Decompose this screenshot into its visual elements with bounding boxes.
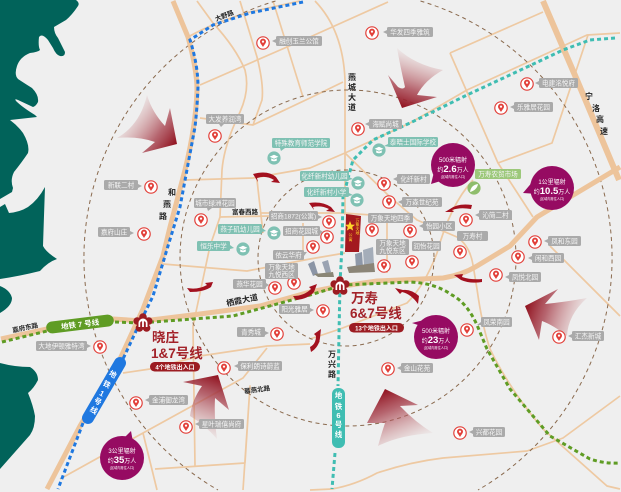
- large arrow: north: [388, 48, 443, 108]
- bubble: 3 km 35万人: 3公里辐射: [108, 447, 136, 455]
- bubble: 500 m 2.6万人: 约2.6万人: [437, 164, 469, 175]
- pill: metro line 6: 6: [336, 411, 341, 420]
- place: 阳光雅居: 阳光雅居: [281, 304, 308, 313]
- bubble: 500 m 23万人: [412, 315, 458, 359]
- place: 万寿村: 万寿村: [463, 231, 483, 240]
- metro line 1: [58, 2, 303, 489]
- place: 凤荣南园: [461, 317, 512, 336]
- school: 特殊教育师范学院: 特殊教育师范学院: [275, 138, 328, 147]
- large arrow: south: [183, 375, 229, 439]
- road name labels: 宁洛高速: [585, 91, 608, 136]
- place: 凤和东园: [529, 236, 581, 248]
- place: 万象天地九悦东区: 万象天地: [379, 238, 406, 248]
- place: 乐雅居花园: [495, 102, 553, 114]
- place: 融创玉兰公馆: [257, 36, 322, 49]
- bubble: 3 km 35万人: 约35万人: [108, 455, 136, 466]
- place: 汇杰新城: 汇杰新城: [575, 331, 602, 340]
- pill: metro line 6: [332, 388, 345, 448]
- school: 恒乐中学: [197, 241, 250, 256]
- bubble: 3 km 35万人: [100, 431, 144, 480]
- place: 城市绿洲花园: [194, 198, 236, 226]
- place: 海赋尚城: 海赋尚城: [372, 119, 399, 128]
- large arrow: south centre: [367, 389, 433, 446]
- bubble: 1 km 10.5万人: 1公里辐射: [538, 178, 566, 186]
- place: 化纤新村: [378, 174, 430, 190]
- place: 依云华府: 依云华府: [275, 250, 302, 259]
- place: 招商花园城: 招商花园城: [285, 226, 318, 235]
- bubble: 500 m 2.6万人: [431, 143, 475, 187]
- large arrow: east: [525, 289, 587, 340]
- place: 凤荣南园: 凤荣南园: [483, 317, 510, 326]
- large arrow: northwest: [117, 95, 177, 153]
- place: 依云华府: [273, 241, 319, 260]
- place: 燕华花园: [233, 279, 281, 294]
- bubble: 3 km 35万人: (区域内常住人口): [110, 465, 134, 470]
- place: 乐雅居花园: 乐雅居花园: [517, 102, 550, 111]
- bubble: 1 km 10.5万人: (区域内常住人口): [540, 196, 564, 201]
- bubble: 500 m 2.6万人: (区域内常住人口): [441, 174, 465, 179]
- place: 闲和西园: 闲和西园: [535, 253, 562, 262]
- place: 城市绿洲花园: 城市绿洲花园: [195, 198, 235, 207]
- bubble: 500 m 2.6万人: 500米辐射: [439, 156, 467, 164]
- road name labels: 和燕路: [159, 187, 176, 221]
- road name labels: 富春西路: [232, 207, 258, 216]
- road name labels: 大野路: [213, 7, 235, 23]
- place: 化纤新村: 化纤新村: [400, 174, 427, 183]
- place: 润怡花园: 润怡花园: [413, 241, 440, 250]
- place: 金山花苑: 金山花苑: [404, 363, 431, 372]
- road name labels: 栖霞大道: [225, 292, 259, 308]
- pill: metro line 6: 地: [335, 390, 343, 400]
- pill: metro line 7: 地铁 7 号线: [60, 317, 100, 331]
- market: 万寿农贸市场: 万寿农贸市场: [478, 169, 518, 178]
- project marker: 万寿天地公寓: [345, 214, 361, 252]
- project marker: 万寿天地公寓: 万象天地: [356, 218, 360, 236]
- place: 万寿村: [454, 231, 488, 258]
- bubble: 500 m 23万人: 约23万人: [422, 335, 450, 346]
- school: 燕子矶幼儿园: [218, 224, 281, 240]
- place: 万森世纪苑: 万森世纪苑: [406, 197, 439, 206]
- road name labels: [11, 7, 608, 396]
- place: 招商1872: [269, 211, 335, 228]
- place: 青秀城: 青秀城: [241, 327, 261, 336]
- project building renderings: [308, 247, 375, 277]
- metro station: 晓庄: 1&7号线: [151, 345, 203, 361]
- place: 沁简二村: [460, 210, 512, 226]
- place: 闲和西园: [512, 251, 564, 263]
- place: 金山花苑: [382, 363, 433, 375]
- place: 招商花园城: [283, 226, 333, 243]
- swoosh arrows: [187, 173, 482, 352]
- project marker: 万寿天地公寓: 公寓: [348, 232, 352, 242]
- place: 阳光雅居: [279, 304, 329, 317]
- market: 万寿农贸市场: [467, 169, 521, 195]
- metro station: 晓庄: 晓庄: [152, 329, 179, 345]
- place: 沁简二村: 沁简二村: [482, 210, 509, 219]
- place: 万象天地四季: [366, 213, 413, 236]
- place: 大发养润湾: 大发养润湾: [209, 114, 242, 123]
- place: 海赋尚城: [352, 119, 402, 135]
- pill: metro line 6: 铁: [335, 401, 343, 411]
- pill: metro line 1: 地铁1号线: [88, 368, 119, 416]
- place: 万象天地九悦西区: 九悦西区: [268, 270, 295, 279]
- place: 嘉府山庄: 嘉府山庄: [101, 227, 128, 236]
- metro station: 万寿: 13个地铁出入口: [355, 324, 398, 332]
- school: 恒乐中学: 恒乐中学: [200, 241, 227, 250]
- pill: metro line 6: 线: [335, 429, 343, 439]
- place: 兴都花园: [454, 427, 505, 439]
- school: 化纤新村幼儿园: 化纤新村幼儿园: [301, 171, 348, 180]
- place: 万象天地九悦西区: [265, 262, 300, 289]
- school: 化纤新村小学: 化纤新村小学: [307, 187, 347, 196]
- place: 大地伊顿雅特湾: 大地伊顿雅特湾: [38, 341, 85, 350]
- place: 保利朗诗蔚蓝: [218, 361, 282, 374]
- metro station: 万寿: 6&7号线: [350, 305, 402, 321]
- bubble: 1 km 10.5万人: [523, 166, 574, 210]
- water bodies: [0, 0, 79, 469]
- road name labels: 燕城大道: [348, 72, 356, 112]
- place: 万象天地四季: 万象天地四季: [371, 213, 411, 222]
- metro line 6: [332, 38, 615, 489]
- place: 润怡花园: [406, 241, 441, 268]
- place: 凤悦北园: 凤悦北园: [512, 272, 539, 281]
- place: 电建洺悦府: 电建洺悦府: [542, 78, 575, 87]
- bubble: 500 m 23万人: (区域内常住人口): [424, 345, 448, 350]
- place: 招商1872: 招商1872(公寓): [271, 211, 316, 220]
- road name labels: 慕燕北路: [244, 383, 271, 396]
- place: 万象天地九悦西区: 万象天地: [268, 262, 295, 272]
- place: 金浦御龙湾: 金浦御龙湾: [152, 395, 185, 404]
- place: 星叶瑞僖尚府: 星叶瑞僖尚府: [202, 419, 242, 428]
- metro station: 万寿: 万寿: [351, 290, 378, 306]
- pill: metro line 6: 号: [335, 420, 343, 429]
- metro line 7: [2, 282, 620, 463]
- pill: metro line 7: [46, 314, 114, 334]
- place: 青秀城: [237, 327, 283, 340]
- school: 燕子矶幼儿园: 燕子矶幼儿园: [220, 224, 260, 233]
- place: 星叶瑞僖尚府: [180, 419, 244, 433]
- place: 怡园小区: [404, 221, 455, 237]
- metro station: 晓庄: 4个地铁出入口: [155, 363, 195, 371]
- place: 新联二村: 新联二村: [108, 180, 135, 189]
- place: 华发四季雅筑: [366, 27, 433, 39]
- school: 泰晤士国际学校: [372, 137, 438, 157]
- place: 融创玉兰公馆: 融创玉兰公馆: [279, 36, 319, 45]
- place: 大发养润湾: [206, 114, 244, 142]
- place: 万象天地九悦东区: [376, 238, 409, 272]
- place: 保利朗诗蔚蓝: 保利朗诗蔚蓝: [240, 361, 280, 370]
- place: 凤悦北园: [490, 269, 541, 282]
- place: 凤和东园: 凤和东园: [551, 236, 578, 245]
- place: 华发四季雅筑: 华发四季雅筑: [390, 27, 430, 36]
- place: 金浦御龙湾: [130, 395, 188, 409]
- school: 化纤新村幼儿园: [300, 171, 365, 190]
- school: 泰晤士国际学校: 泰晤士国际学校: [390, 137, 436, 146]
- bubble: 1 km 10.5万人: 约10.5万人: [534, 186, 570, 197]
- school: 化纤新村小学: [304, 187, 364, 207]
- road name labels: 嘉府东路: [11, 320, 39, 335]
- place: 万森世纪苑: [383, 196, 442, 208]
- place: 电建洺悦府: [521, 78, 578, 90]
- place: 大地伊顿雅特湾: [36, 341, 106, 353]
- place: 兴都花园: 兴都花园: [476, 427, 503, 436]
- school: 特殊教育师范学院: [267, 138, 330, 165]
- bubble: 500 m 23万人: 500米辐射: [422, 327, 450, 335]
- place: 燕华花园: 燕华花园: [236, 279, 263, 288]
- metro station: 万寿: [330, 276, 404, 332]
- place: 万象天地九悦东区: 九悦东区: [379, 246, 406, 255]
- place: 新联二村: [104, 180, 157, 193]
- place: 怡园小区: 怡园小区: [426, 221, 453, 230]
- metro station: 晓庄: [133, 313, 203, 372]
- road name labels: 万兴路: [328, 350, 336, 379]
- place: 汇杰新城: [553, 331, 604, 343]
- place: 嘉府山庄: [98, 227, 150, 240]
